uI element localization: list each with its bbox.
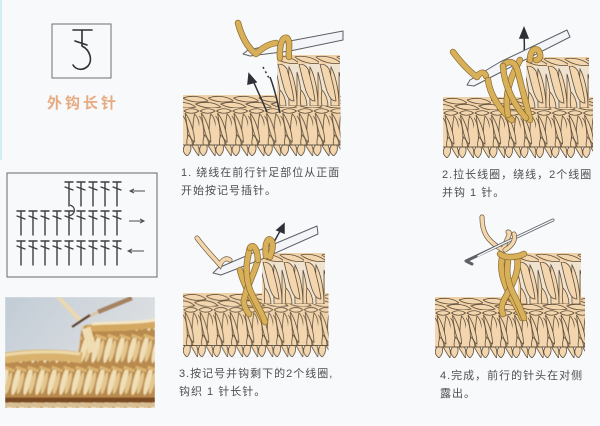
step 3 illustration	[183, 224, 328, 357]
fabric	[443, 57, 593, 158]
hook	[213, 226, 318, 275]
yarn	[238, 23, 289, 58]
step 1 caption: 1. 绕线在前行针足部位从正面	[181, 165, 340, 179]
step 3 caption: 钩织 1 针长针。	[179, 384, 266, 398]
step 3 caption: 3.按记号并钩剩下的2个线圈,	[179, 366, 333, 380]
step 2 caption: 并钩 1 针。	[442, 185, 505, 199]
arrow	[248, 67, 280, 113]
fabric	[183, 55, 340, 156]
step 1 caption	[181, 165, 340, 197]
step 4 caption: 露出。	[440, 386, 476, 400]
chart row 3	[17, 241, 121, 265]
chart row 1	[65, 182, 121, 206]
chart row 2	[17, 211, 121, 235]
step 4 caption: 4.完成，前行的针头在对侧	[440, 368, 583, 382]
title: 外钩长针	[47, 94, 119, 112]
step 3 caption	[179, 366, 333, 398]
step 2 illustration	[443, 28, 593, 158]
yarn	[500, 234, 524, 318]
yarn tail	[482, 217, 509, 250]
step 2 caption	[442, 167, 592, 199]
crochet photo	[5, 297, 155, 408]
arrow	[270, 224, 284, 250]
symbol chart	[7, 173, 157, 277]
yarn	[197, 238, 273, 322]
hook highlight	[478, 220, 553, 256]
row direction arrows	[128, 189, 145, 253]
yarn	[453, 49, 540, 120]
hook	[243, 31, 343, 56]
step 4 caption	[440, 368, 583, 400]
step 1 illustration	[183, 23, 343, 156]
hook	[467, 30, 570, 86]
arrow	[520, 28, 528, 62]
post hook marker	[69, 205, 74, 216]
stitch symbol box	[52, 24, 111, 78]
step 2 caption: 2.拉长线圈，绕线，2个线圈	[442, 167, 592, 181]
hook	[466, 220, 553, 264]
step 4 illustration	[435, 217, 585, 358]
fabric	[435, 253, 585, 358]
step 1 caption: 开始按记号插针。	[181, 183, 277, 197]
fabric	[183, 253, 328, 357]
